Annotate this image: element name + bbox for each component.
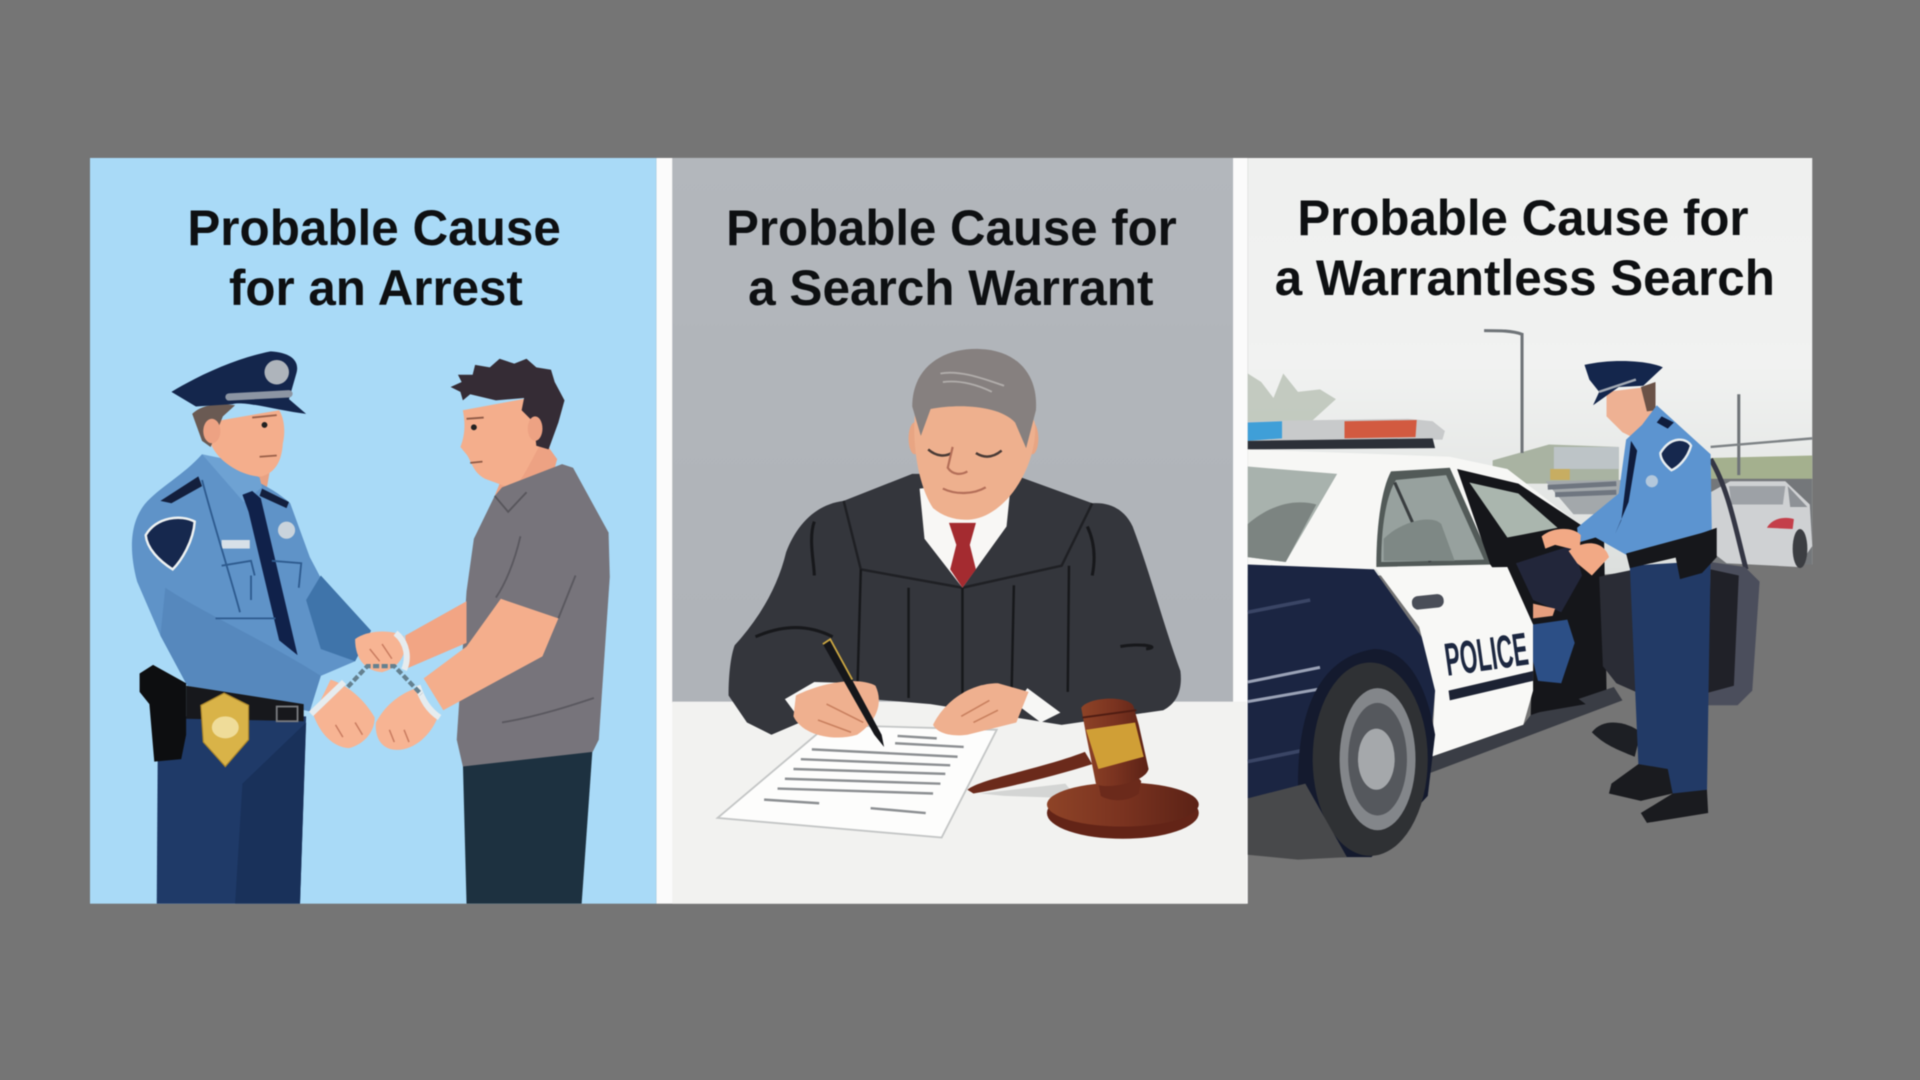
heading: arrest: Probable Cause: [187, 200, 561, 256]
parked silver car: [1711, 481, 1812, 568]
judge figure: [729, 349, 1181, 735]
background white strips: [656, 158, 1248, 904]
writing hands and pen: [785, 639, 1060, 747]
heading: search warrant: Probable Cause for: [726, 200, 1177, 256]
officer figure: [132, 351, 371, 904]
panel: probable cause for an arrest: [90, 158, 656, 904]
heading: warrantless search: a Warrantless Search: [1275, 250, 1775, 306]
heading: warrantless search: Probable Cause for: [1297, 190, 1749, 246]
heading: search warrant: a Search Warrant: [748, 260, 1154, 316]
warrant document: [718, 725, 997, 838]
suspect figure: [405, 359, 610, 904]
panel: probable cause for a search warrant: [672, 158, 1247, 904]
police car: [1248, 419, 1641, 860]
police lettering: POLICE: [1442, 623, 1531, 686]
panel: probable cause for a warrantless search: [1248, 158, 1812, 860]
heading: arrest: for an Arrest: [229, 260, 523, 316]
seated suspect: [1516, 545, 1586, 713]
heading: arrest: [187, 200, 561, 316]
gavel: [967, 699, 1199, 839]
officer searching: [1542, 361, 1717, 823]
background scenery: [1248, 331, 1812, 564]
handcuffs and hands: [311, 631, 440, 750]
heading: warrantless search: [1275, 190, 1775, 306]
open car door: [1599, 459, 1760, 705]
heading: search warrant: [726, 200, 1177, 316]
